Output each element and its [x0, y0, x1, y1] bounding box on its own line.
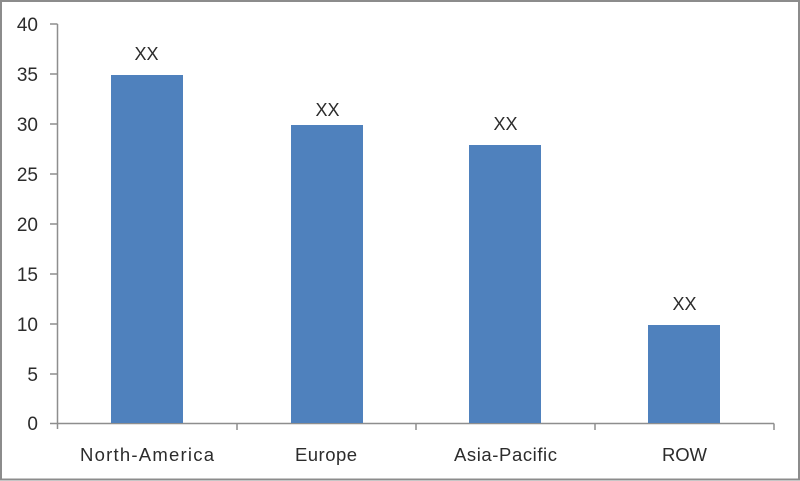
bar: Asia-Pacific: XX [493, 114, 518, 134]
y axis [17, 15, 58, 435]
bar: North-America [80, 44, 215, 465]
bar: Asia-Pacific [454, 114, 557, 465]
bar: North-America: XX [134, 44, 159, 64]
y axis: 20 [17, 215, 38, 236]
y axis: 0 [27, 414, 38, 435]
x axis [50, 424, 774, 430]
bar: ROW: ROW [662, 444, 708, 465]
bar: ROW [648, 294, 720, 465]
bar: North-America: North-America [80, 444, 215, 465]
y axis: 10 [17, 315, 38, 336]
bar: Asia-Pacific: Asia-Pacific [454, 444, 557, 465]
y axis: 5 [27, 365, 38, 386]
y axis: 30 [17, 115, 38, 136]
y axis: 25 [17, 165, 38, 186]
bar: Europe: XX [315, 100, 340, 120]
y axis: 15 [17, 265, 38, 286]
bar: ROW: XX [672, 294, 697, 314]
y axis: 40 [17, 15, 38, 36]
bar: Europe: Europe [295, 444, 357, 465]
y axis: 35 [17, 65, 38, 86]
bar: Europe [291, 100, 363, 465]
